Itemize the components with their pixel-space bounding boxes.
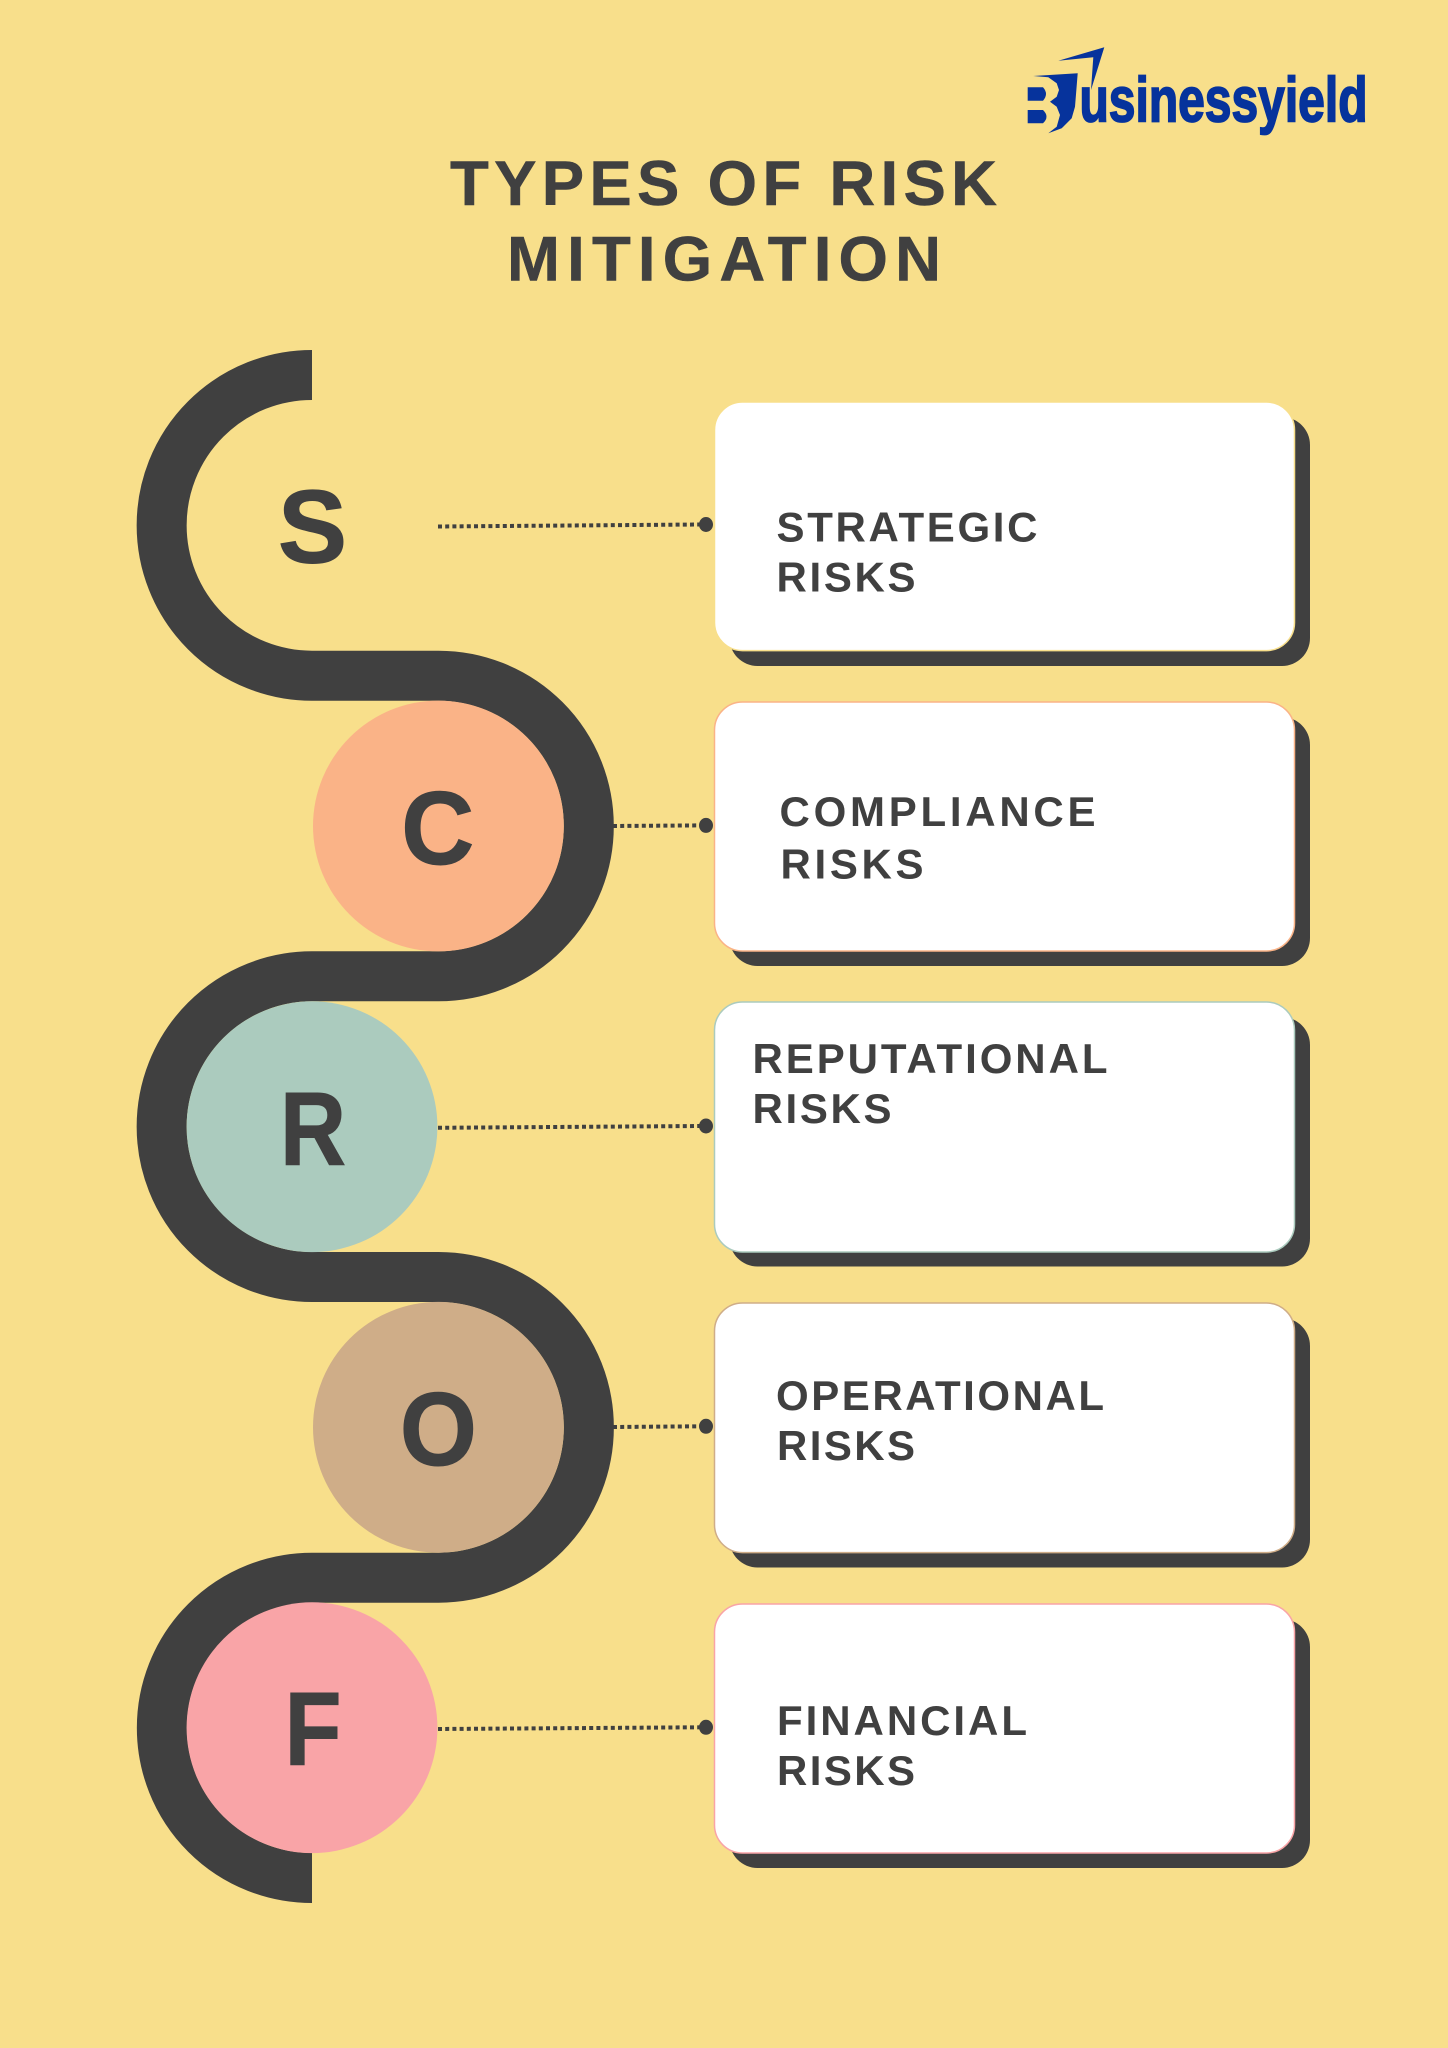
letter S: S [278, 470, 347, 586]
card: financial risks [714, 1604, 1294, 1853]
title: TYPES OF RISK [450, 149, 997, 219]
card: reputational risks [714, 1002, 1294, 1252]
panel: reputational risks [714, 1002, 1310, 1266]
label: financial risks: RISKS [777, 1747, 915, 1794]
label: operational risks: OPERATIONAL [776, 1372, 1104, 1419]
letter R: R [280, 1072, 346, 1188]
step F: circle, letter and connector [187, 1602, 713, 1853]
label: reputational risks [752, 1035, 1108, 1132]
connector C [613, 818, 713, 833]
connector R [438, 1118, 713, 1134]
label: compliance risks [780, 788, 1096, 887]
label: compliance risks: COMPLIANCE [780, 788, 1096, 835]
logo icon: arrow and B mark [1028, 47, 1104, 133]
circle F [187, 1602, 437, 1853]
label: reputational risks: REPUTATIONAL [752, 1035, 1108, 1082]
step C: circle, letter and connector [313, 701, 713, 951]
circle O [313, 1302, 564, 1553]
card: operational risks [714, 1303, 1294, 1553]
label: reputational risks: RISKS [752, 1085, 892, 1132]
label: operational risks: RISKS [777, 1422, 915, 1469]
panel: strategic risks [714, 402, 1310, 666]
step R: circle, letter and connector [187, 1001, 713, 1252]
label: strategic risks [776, 504, 1038, 601]
label: operational risks [776, 1372, 1104, 1469]
logo: Businessyield [1028, 47, 1368, 136]
connector O [613, 1419, 713, 1434]
connector F [438, 1720, 713, 1735]
letter F: F [284, 1672, 342, 1788]
label: compliance risks: RISKS [780, 840, 924, 887]
label: financial risks [777, 1697, 1027, 1794]
letter O: O [400, 1372, 477, 1488]
card: strategic risks [714, 402, 1294, 651]
card: compliance risks [714, 702, 1294, 951]
step O: circle, letter and connector [313, 1302, 713, 1553]
panel: financial risks [714, 1604, 1310, 1868]
title: MITIGATION [507, 225, 941, 295]
label: financial risks: FINANCIAL [777, 1697, 1027, 1744]
step S: letter and connector [278, 470, 713, 586]
circle C [313, 701, 564, 951]
title [450, 149, 997, 295]
circle R [187, 1001, 437, 1252]
logo wordmark: usinessyield [1080, 66, 1368, 136]
letter C: C [401, 771, 474, 887]
label: strategic risks: STRATEGIC [776, 504, 1038, 550]
panel: compliance risks [714, 702, 1310, 966]
serpentine path [162, 375, 589, 1878]
label: strategic risks: RISKS [776, 554, 916, 601]
panel: operational risks [714, 1303, 1310, 1568]
connector S [438, 517, 713, 532]
